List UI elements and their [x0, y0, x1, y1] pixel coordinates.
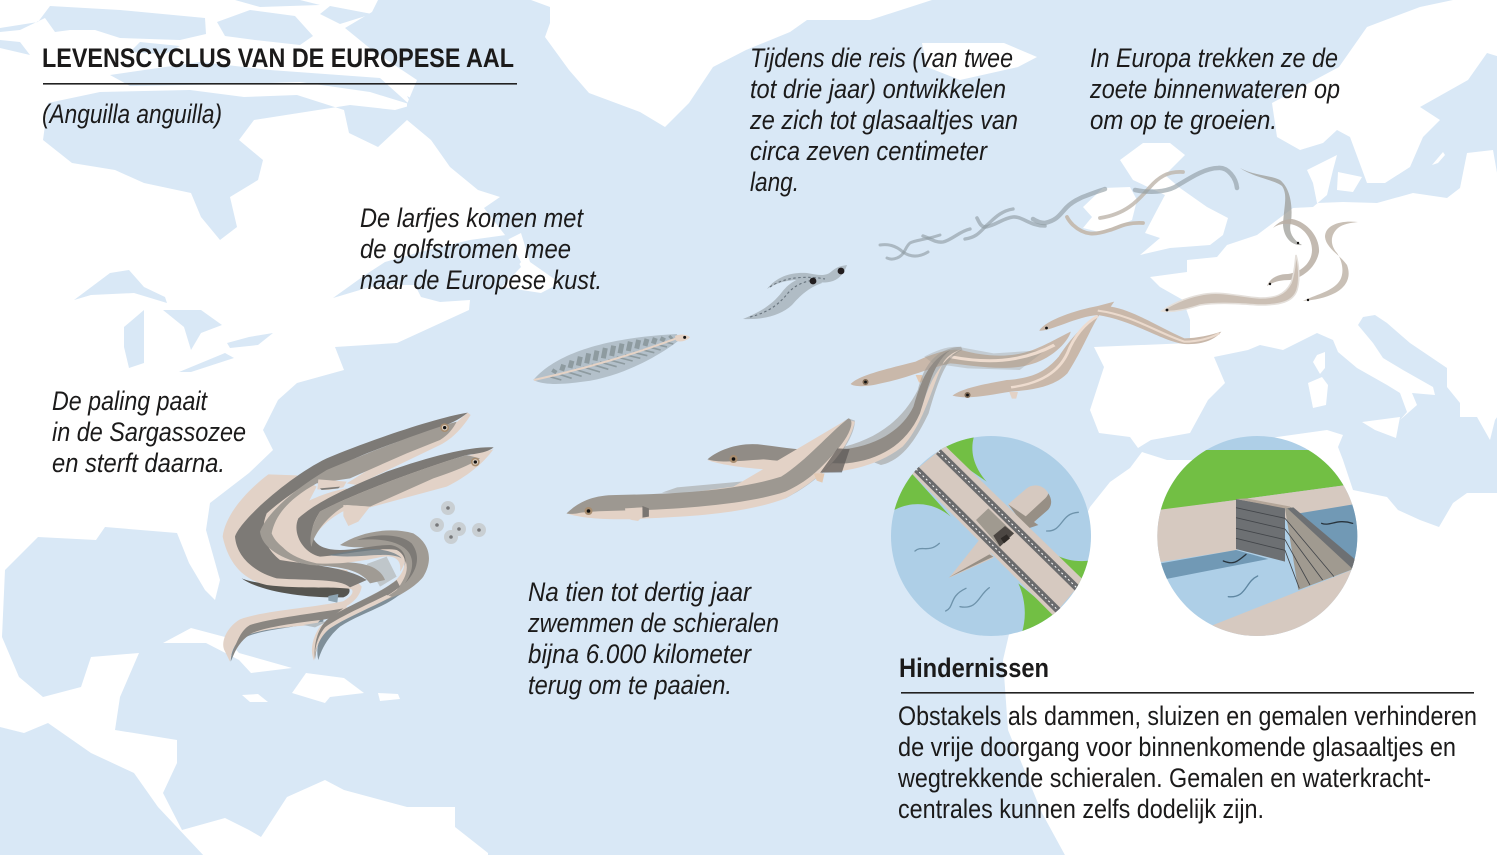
text: stage spawning	[52, 386, 246, 478]
newfoundland	[502, 233, 560, 293]
text: stage silver eels: zwemmen de schieralen	[527, 608, 779, 638]
great lakes	[74, 270, 167, 303]
text: stage glass eels: circa zeven centimeter	[750, 136, 988, 166]
text: stage glass eels: Tijdens die reis (van twee	[750, 43, 1013, 73]
text: stage larvae: de golfstromen mee	[360, 234, 571, 264]
europe	[1090, 150, 1500, 448]
elvers in european waters	[1162, 168, 1358, 311]
text: stage spawning: in de Sargassozee	[52, 417, 246, 447]
text: stage glass eels: lang.	[750, 167, 799, 197]
glass eels migrating	[880, 168, 1237, 259]
text: stage silver eels: bijna 6.000 kilometer	[528, 639, 752, 669]
obstacles text: wegtrekkende schieralen. Gemalen en waterkracht-	[897, 763, 1431, 793]
scandinavia	[1272, 0, 1500, 183]
gulf of st lawrence	[333, 235, 521, 302]
corsica sardinia sicily	[1313, 352, 1325, 374]
text: stage growth: zoete binnenwateren op	[1089, 74, 1340, 104]
adult eels spawning	[223, 413, 494, 662]
greenland	[531, 0, 932, 127]
circle: lock under road	[890, 433, 1095, 638]
text: stage growth: om op te groeien.	[1090, 105, 1277, 135]
circle: dam	[1153, 435, 1360, 642]
eel eyes	[440, 423, 480, 466]
larva (leptocephalus)	[533, 334, 690, 384]
obstacles text	[897, 701, 1477, 824]
large silver eels	[567, 347, 962, 521]
obstacles heading: Hindernissen	[899, 653, 1049, 683]
hudson bay	[43, 90, 450, 240]
eggs	[430, 501, 486, 544]
africa	[1003, 430, 1500, 857]
subtitle: species name: (Anguilla anguilla)	[42, 99, 222, 129]
text: stage spawning: en sterft daarna.	[52, 448, 225, 478]
text: stage glass eels: ze zich tot glasaaltjes van	[749, 105, 1018, 135]
text: stage silver eels: terug om te paaien.	[528, 670, 732, 700]
arctic waters	[0, 6, 206, 40]
silver eel eyes	[584, 242, 1309, 515]
young larvae	[743, 265, 847, 319]
north america	[0, 0, 520, 857]
text: stage growth: In Europa trekken ze de	[1090, 43, 1338, 73]
title: LEVENSCYCLUS VAN DE EUROPESE AAL	[42, 43, 514, 73]
iceland	[922, 43, 1037, 80]
text: stage larvae: naar de Europese kust.	[360, 265, 602, 295]
text: stage larvae	[360, 203, 602, 295]
text: stage larvae: De larfjes komen met	[360, 203, 584, 233]
text: stage glass eels	[749, 43, 1018, 197]
caribbean	[163, 628, 292, 673]
ireland and britain	[1083, 187, 1137, 233]
text: stage spawning: De paling paait	[52, 386, 208, 416]
text: stage growth	[1089, 43, 1340, 135]
text: stage silver eels	[527, 577, 779, 700]
text: stage silver eels: Na tien tot dertig jaar	[528, 577, 752, 607]
small silver eels	[851, 302, 1221, 399]
obstacles text: centrales kunnen zelfs dodelijk zijn.	[898, 794, 1264, 824]
text: stage glass eels: tot drie jaar) ontwikkelen	[750, 74, 1006, 104]
